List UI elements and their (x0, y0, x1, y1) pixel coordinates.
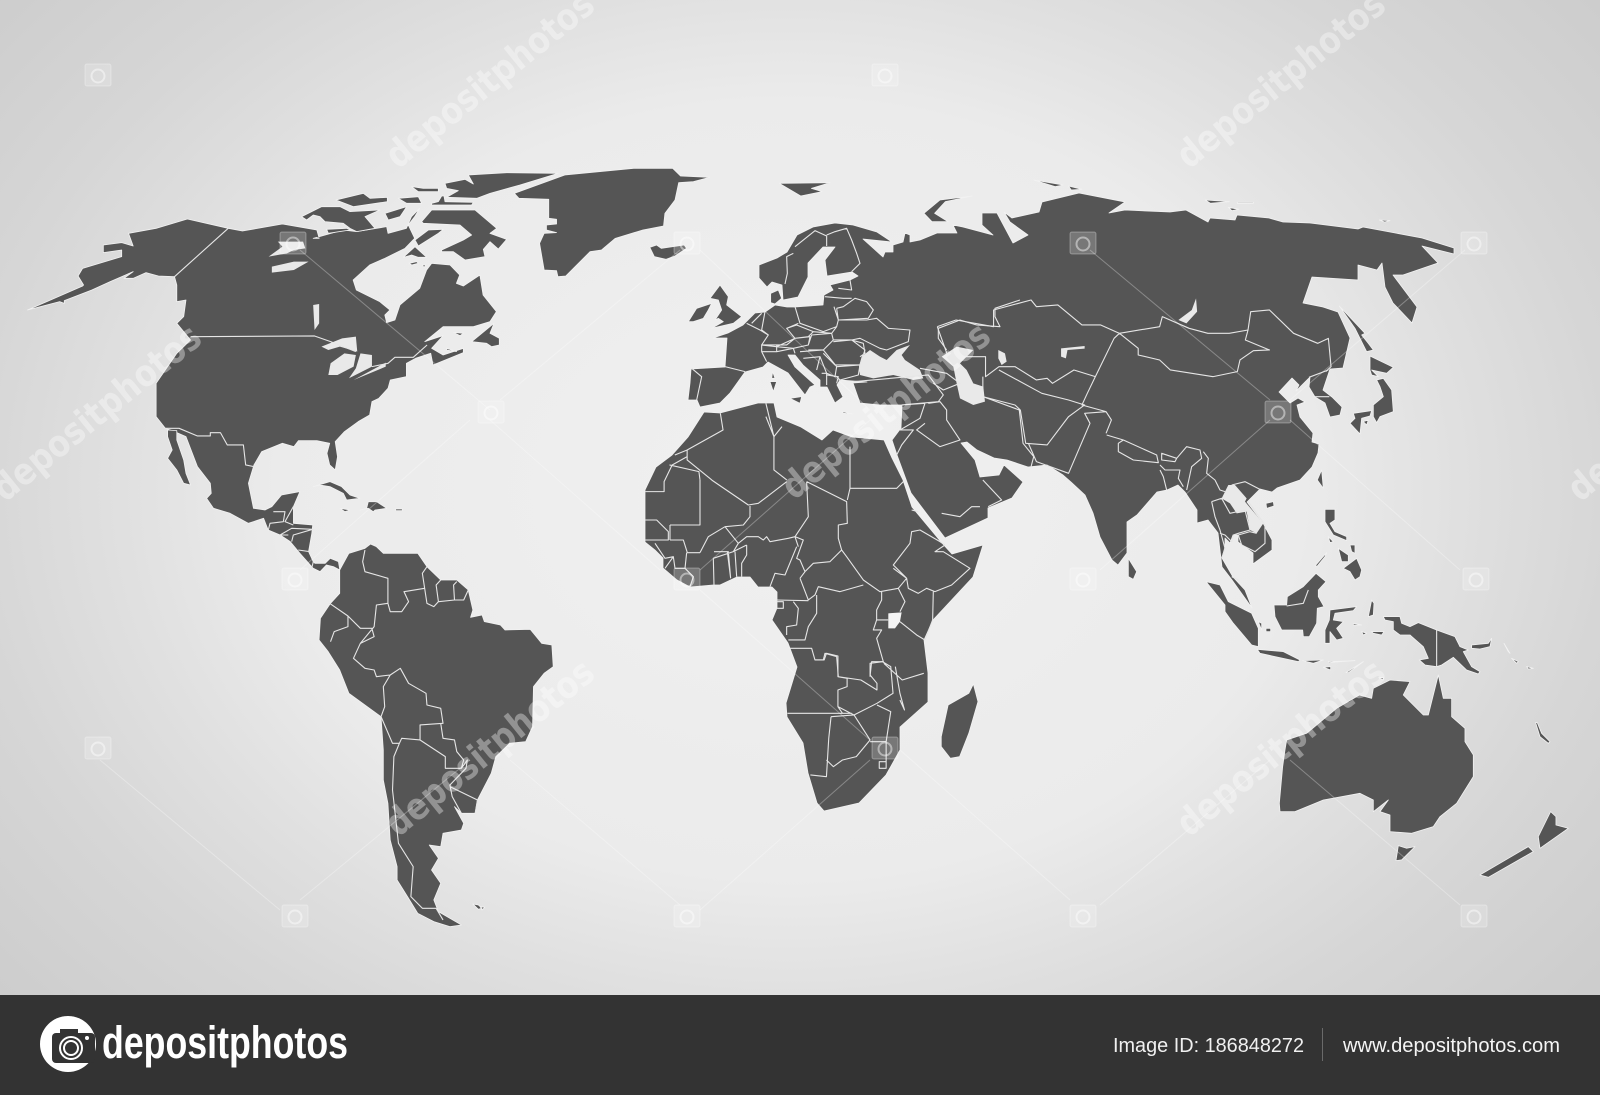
baja california (168, 430, 191, 485)
south american borders (330, 550, 477, 920)
south and southeast asia detail (1107, 435, 1323, 580)
logo wordmark: depositphotos (102, 1017, 348, 1068)
south america landmass (319, 544, 553, 927)
north america and greenland (28, 168, 709, 572)
website url: www.depositphotos.com (1342, 1035, 1560, 1057)
iceland (650, 245, 687, 259)
north american borders (165, 228, 427, 467)
new guinea and pacific islands (1383, 617, 1550, 743)
newfoundland and gulf islets (447, 323, 499, 352)
arctic islands (302, 173, 558, 267)
saharan border lines (645, 403, 850, 492)
arctic archipelago (302, 173, 558, 352)
watermark text (0, 0, 1600, 845)
north african borders (645, 403, 850, 492)
icon: depositphotos camera logo (40, 1016, 96, 1072)
lakes baikal and balkhash (1061, 298, 1197, 358)
arctic and asian inland detail (779, 180, 1390, 507)
eurasian mainland (688, 193, 1454, 608)
north america greenland base layer (28, 168, 709, 572)
watermark text: depositphotos (377, 650, 603, 845)
lake victoria (888, 612, 902, 628)
australia (1279, 675, 1473, 833)
canadian and great lakes (269, 242, 386, 380)
central american borders (268, 507, 313, 568)
north american mainland (28, 208, 496, 572)
greenland (514, 168, 709, 277)
diagonal watermark lattice lines (100, 250, 1465, 910)
sri lanka, hainan, taiwan (1128, 470, 1323, 579)
maritime southeast asia and oceania (1206, 509, 1568, 877)
central and south asian borders (937, 300, 1331, 507)
central america and caribbean (268, 482, 402, 568)
korea border (1309, 370, 1329, 397)
image id: Image ID: 186848272 (1113, 1035, 1304, 1057)
japanese islands (1339, 306, 1393, 434)
african continent (645, 403, 983, 811)
madagascar (941, 684, 978, 758)
europe and near east detail (688, 228, 1020, 455)
caribbean islands (313, 482, 402, 512)
british isles and mediterranean islands (688, 285, 853, 414)
falkland islands (473, 904, 485, 910)
eurasia (688, 180, 1454, 608)
arctic islands of eurasia (779, 180, 1390, 222)
island borders (1287, 590, 1437, 667)
southern african borders (787, 653, 924, 777)
laos overlay (1222, 485, 1263, 533)
watermark text: depositphotos (773, 313, 999, 508)
indonesia, philippines and malaysia islands (1206, 509, 1384, 680)
footer bar (0, 995, 1600, 1095)
south and southeast asian borders (1107, 435, 1265, 580)
southern african detail (787, 653, 978, 777)
european and near east borders (692, 228, 1020, 455)
footer divider (1322, 1028, 1324, 1061)
japan and sakhalin (1309, 306, 1393, 434)
central african borders (645, 480, 980, 677)
watermark text: depositphotos (1168, 650, 1394, 845)
tasmania (1396, 846, 1415, 861)
watermark camera icons (85, 64, 1489, 927)
africa (645, 403, 983, 811)
west, central and east african border lines (645, 480, 980, 677)
black sea, caspian and aral (859, 345, 1007, 405)
new zealand (1480, 812, 1568, 877)
south america (319, 544, 553, 927)
